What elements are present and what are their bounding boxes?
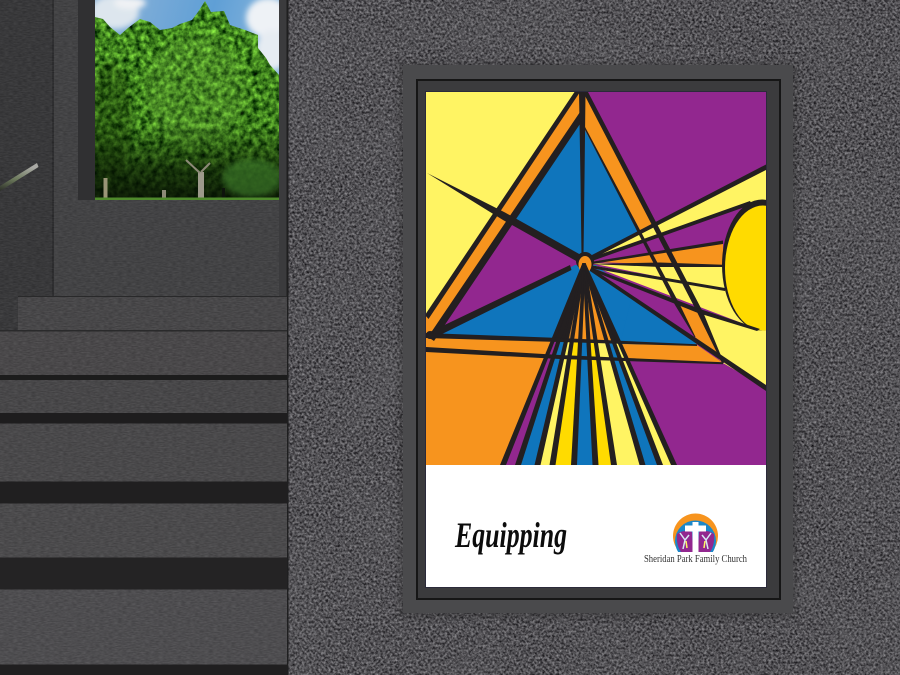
fan black lines (426, 263, 723, 465)
logo emblem (673, 514, 718, 552)
fan colour bands (521, 342, 671, 465)
tree foliage (88, 0, 282, 200)
handrail (0, 163, 38, 191)
window view with trees (88, 0, 290, 200)
black leading lines (425, 92, 766, 391)
window reveal (78, 0, 95, 200)
grass (95, 198, 279, 200)
poster sheet (425, 92, 802, 587)
poster title: Equipping (454, 515, 567, 555)
concrete wall right (288, 0, 900, 675)
abstract stained-glass artwork (425, 92, 802, 465)
logo wordmark: Sheridan Park Family Church (644, 554, 748, 565)
fan upper wedge (556, 284, 616, 341)
colour fields (426, 92, 722, 465)
stairs (0, 296, 287, 675)
clouds (91, 0, 290, 70)
right rays (590, 167, 766, 388)
sun ellipse (722, 200, 766, 330)
poster frame (399, 63, 797, 618)
tree trunks (104, 160, 225, 200)
church logo (644, 514, 748, 565)
left stairwell wall (0, 0, 288, 675)
centre hub (576, 252, 594, 273)
